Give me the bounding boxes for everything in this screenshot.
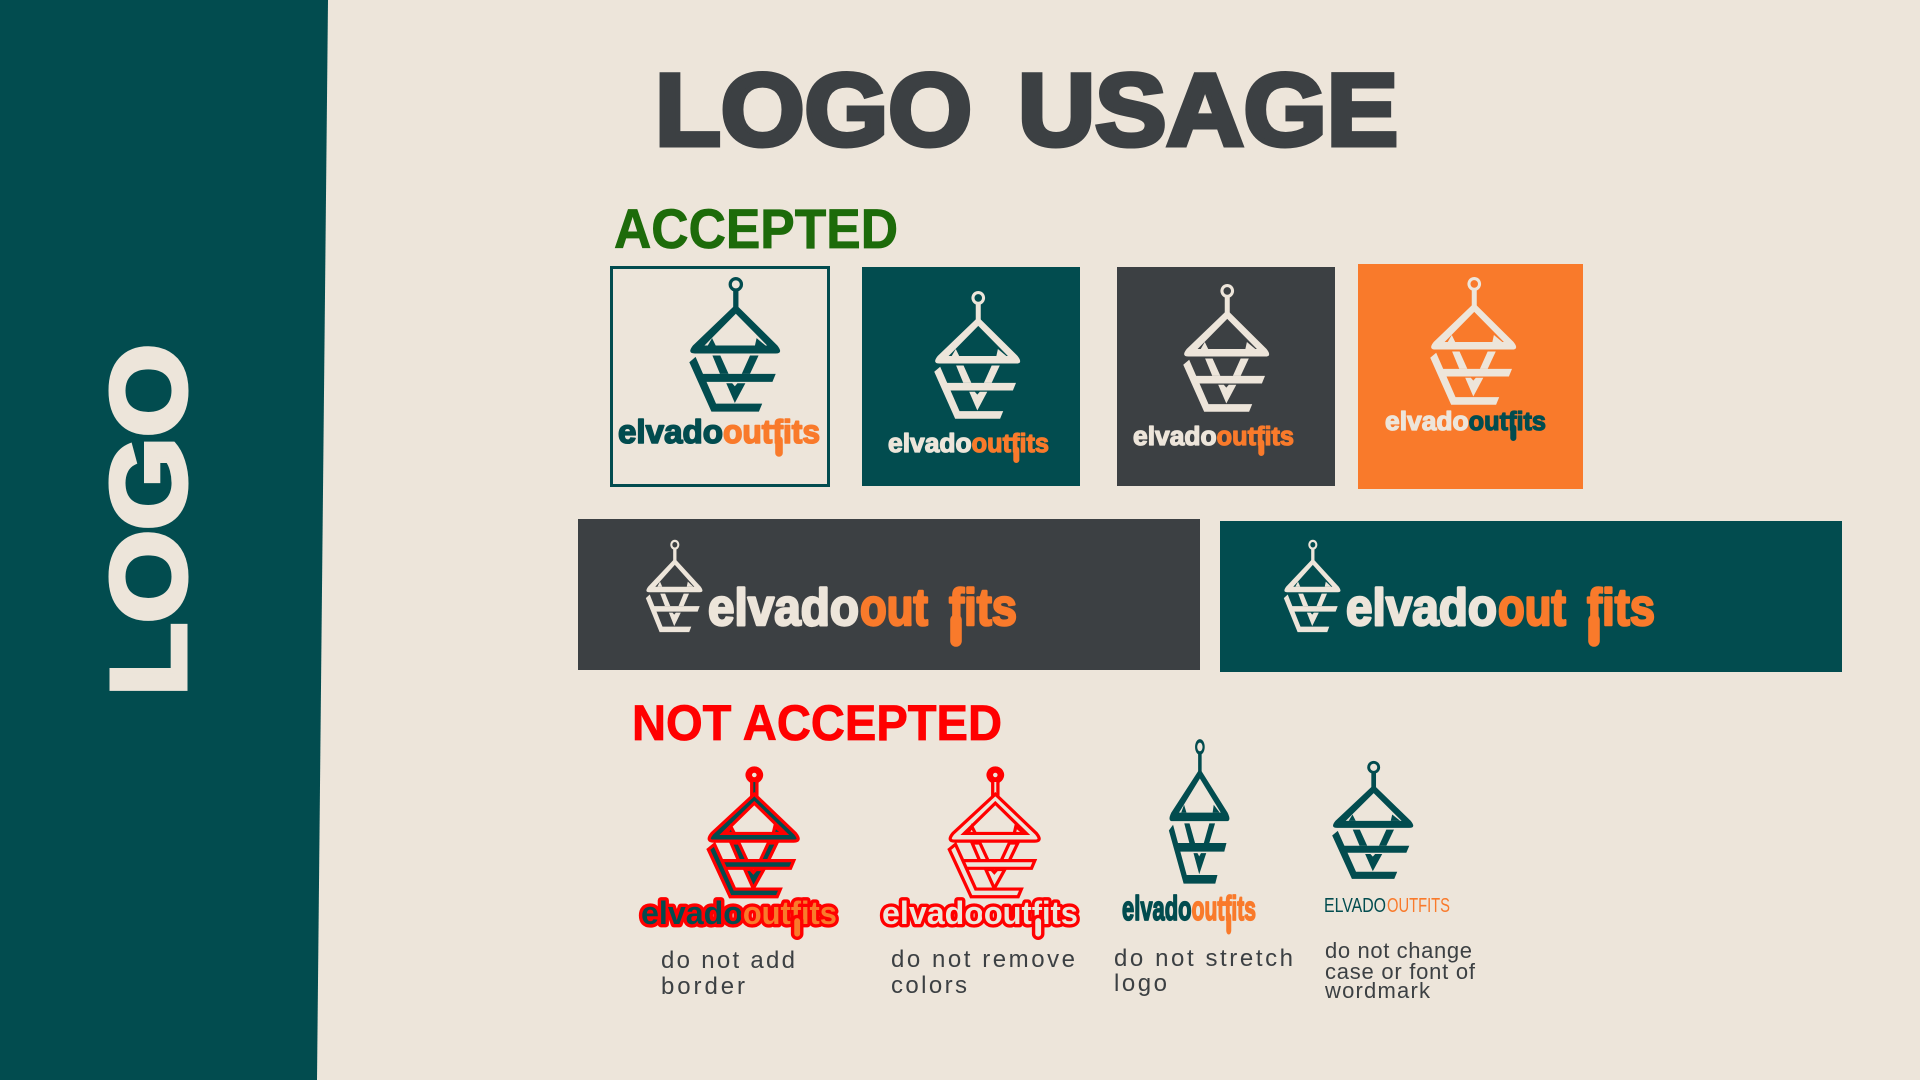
caption: do not remove [891, 946, 1075, 973]
wordmark in capitals [1324, 895, 1450, 917]
panel: logo on orange [1358, 264, 1583, 489]
panel: horizontal logo on charcoal [578, 519, 1200, 670]
panel: horizontal logo on teal [1220, 521, 1842, 672]
wordmark: elvado outfits: elvado [1385, 406, 1469, 436]
wordmark: elvado outfits [1385, 406, 1546, 440]
misuse: border added [641, 768, 837, 1000]
wordmark: elvado outfits [888, 428, 1049, 462]
sidebar panel [0, 0, 328, 1080]
wordmark with red border: outfits [743, 895, 837, 931]
wordmark: elvado out fits [708, 579, 1017, 646]
caption: logo [1114, 970, 1167, 997]
panel: logo on teal [862, 267, 1080, 486]
sidebar heading: LOGO: LOGO [90, 344, 208, 696]
stretched wordmark [1122, 890, 1256, 934]
wordmark: elvado out fits [1346, 579, 1655, 646]
wordmark with red border [641, 895, 837, 937]
caption: case or font of [1325, 959, 1476, 984]
wordmark: elvado out fits: elvado [1346, 579, 1497, 637]
title [655, 53, 1398, 167]
icon: hanger light [1430, 277, 1516, 405]
misuse: changed case and font [1324, 761, 1476, 1003]
outline wordmark: outfits [984, 895, 1078, 931]
wordmark: elvado outfits: elvado [888, 428, 972, 458]
stretched wordmark: elvado [1122, 890, 1192, 928]
icon: outline hanger [949, 768, 1039, 897]
heading: not accepted: NOT ACCEPTED [632, 695, 1002, 751]
caption: do not stretch [1114, 945, 1293, 972]
misuse: stretched logo [1114, 739, 1293, 997]
wordmark: elvado out fits: elvado [708, 579, 859, 637]
wordmark: elvado outfits: outfits [1469, 406, 1546, 436]
icon: stretched hanger [1169, 739, 1229, 884]
icon: hanger light [646, 540, 702, 632]
outline wordmark: elvado [882, 895, 984, 931]
misuse: colors removed [882, 768, 1078, 999]
icon: hanger with red border [708, 768, 798, 897]
wordmark: elvado out fits: fits [949, 579, 1017, 637]
wordmark: elvado outfits [1133, 421, 1294, 455]
wordmark: elvado out fits: out [860, 579, 928, 637]
panel: logo on charcoal [1117, 267, 1335, 486]
panel: outlined logo on light [612, 268, 828, 486]
wordmark in capitals: ELVADO [1324, 895, 1386, 917]
wordmark: elvado outfits: elvado [618, 413, 723, 450]
caption: border [661, 973, 745, 1000]
caption: colors [891, 972, 967, 999]
caption: do not add [661, 947, 795, 974]
icon: hanger teal [689, 277, 780, 412]
wordmark: elvado outfits: elvado [1133, 421, 1217, 451]
wordmark: elvado out fits: fits [1587, 579, 1655, 637]
icon: hanger light [1183, 284, 1269, 412]
outline wordmark [882, 895, 1078, 937]
title: USAGE [1018, 53, 1398, 167]
wordmark in capitals: OUTFITS [1387, 895, 1450, 917]
wordmark with red border: elvado [641, 895, 743, 931]
title: LOGO [655, 53, 972, 167]
icon: hanger teal [1332, 761, 1413, 879]
wordmark: elvado outfits [618, 413, 820, 456]
icon: hanger light [934, 291, 1020, 419]
heading: accepted: ACCEPTED [614, 197, 898, 260]
stretched wordmark: outfits [1192, 890, 1256, 928]
wordmark: elvado outfits: outfits [972, 428, 1049, 458]
wordmark: elvado outfits: outfits [1217, 421, 1294, 451]
caption: wordmark [1324, 978, 1431, 1003]
caption: do not change [1325, 938, 1472, 963]
wordmark: elvado outfits: outfits [723, 413, 820, 450]
icon: hanger light [1284, 540, 1340, 632]
wordmark: elvado out fits: out [1498, 579, 1566, 637]
